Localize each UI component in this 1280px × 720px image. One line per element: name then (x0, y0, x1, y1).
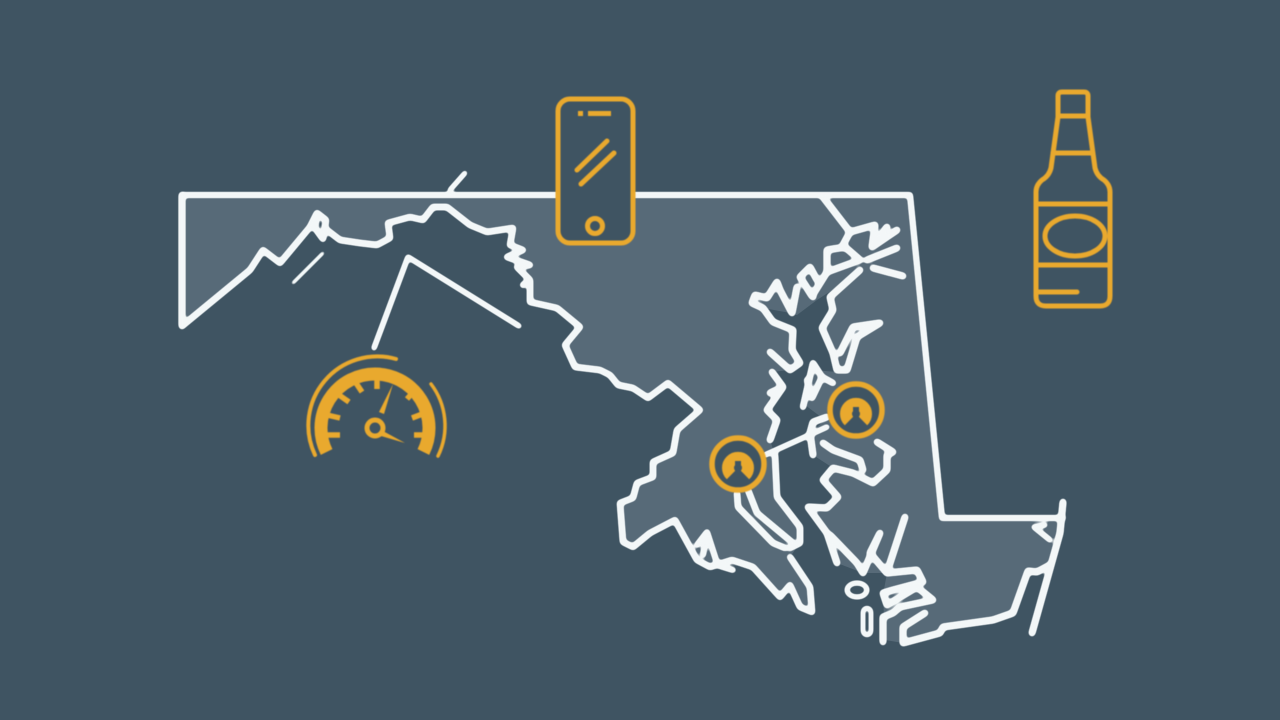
state border: north and east edges (182, 195, 1063, 518)
small island oval (847, 583, 867, 597)
northern border tick (450, 173, 465, 190)
Atlantic barrier line (1032, 502, 1063, 633)
western peninsula inlet (697, 532, 733, 570)
western shore rivers (737, 455, 800, 548)
upper Chesapeake Bay outline (752, 197, 903, 440)
icon: pin east (830, 384, 882, 436)
bay island strokes (803, 363, 833, 407)
icon: speedometer gauge (308, 356, 445, 456)
icon: bottle (1036, 92, 1110, 306)
ridge coastline west (182, 207, 812, 612)
ticks (327, 378, 427, 435)
state border: west edge (179, 195, 185, 326)
map outlines (182, 173, 1063, 643)
connector between pins (765, 427, 827, 455)
southern islands and inlets (883, 565, 1050, 643)
hub (367, 420, 383, 436)
gauge band (321, 374, 429, 452)
coastal bay mark (1034, 525, 1050, 540)
outer arc right (431, 384, 445, 456)
needle (379, 384, 393, 414)
small diagonal stroke (293, 253, 323, 283)
eastern shore lower (808, 417, 905, 573)
eastern shore upper (822, 270, 880, 370)
icon: pin west (712, 438, 764, 490)
chevron line (374, 257, 519, 348)
outer arc left (308, 356, 396, 455)
map: Maryland (182, 173, 1063, 643)
small island pill (863, 608, 871, 635)
icon: smartphone (558, 99, 633, 243)
needle tail (381, 431, 405, 443)
land fill (182, 195, 1060, 643)
